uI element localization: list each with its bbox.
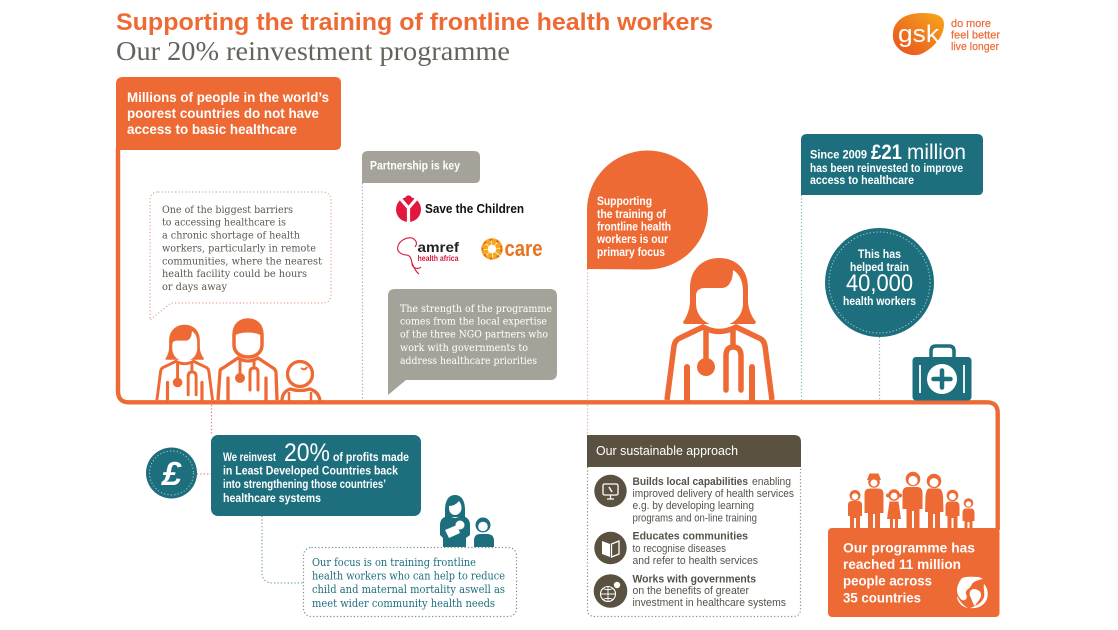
child 3 (962, 498, 974, 528)
panel: 11 million people: Our programme has (843, 540, 975, 556)
girl (886, 489, 902, 528)
callout: barriers: communities, where the nearest (162, 256, 323, 268)
callout: barriers: health facility could be hours (162, 268, 307, 280)
text: works with governments: Works with governments (632, 574, 756, 586)
logo: amref health africa: health africa (418, 254, 459, 263)
panel: 11 million people: people across (843, 572, 932, 588)
callout: strength of the programme: The strength of the programme (400, 303, 552, 315)
text: builds local capabilities: improved delivery of health services (632, 488, 794, 500)
logo: amref health africa (398, 238, 459, 274)
icon: pound coin (146, 448, 197, 498)
panel: reinvest 20%: We reinvest (223, 450, 276, 464)
badge: 40,000 health workers: This has (858, 247, 901, 261)
panel: millions of people: access to basic healthcare (127, 122, 297, 137)
callout: barriers: to accessing healthcare is (162, 216, 286, 228)
callout: barriers: or days away (162, 281, 227, 293)
timeline line (118, 148, 998, 530)
text: works with governments (632, 574, 786, 609)
icon: gsk logo: do more (951, 18, 991, 30)
badge: 40,000 health workers (825, 228, 934, 337)
callout: primary focus (587, 151, 708, 270)
icon: gsk logo: gsk (898, 21, 940, 48)
callout: primary focus: frontline health (597, 222, 671, 234)
title (116, 9, 713, 66)
icon: gsk logo (893, 13, 1000, 55)
panel: partnership is key: Partnership is key (370, 160, 461, 172)
text: builds local capabilities: enabling (752, 476, 791, 488)
panel: 21 million: access to healthcare (810, 173, 914, 187)
badge: 40,000 health workers: helped train (850, 260, 909, 274)
icon: male doctor (218, 319, 277, 400)
icon: book (594, 532, 627, 564)
callout: our focus: Our focus is on training frontline (312, 555, 476, 569)
icon: group of people (848, 472, 974, 528)
text: works with governments: investment in healthcare systems (632, 597, 786, 609)
header: our sustainable approach: Our sustainable approach (596, 443, 738, 458)
icon: mother and baby (440, 495, 494, 547)
panel: 21 million: has been reinvested to improve (810, 161, 963, 175)
header: our sustainable approach (587, 435, 801, 467)
callout: our focus: health workers who can help to reduce (312, 568, 505, 582)
child 1 (848, 490, 862, 528)
callout: our focus (304, 548, 516, 616)
text: works with governments: on the benefits of greater (632, 585, 749, 597)
icon: globe (594, 574, 627, 608)
child 2 (946, 490, 960, 528)
text: builds local capabilities: programs and on-line training (632, 512, 757, 524)
title: Supporting the training of frontline health workers (116, 9, 713, 36)
callout: barriers (150, 192, 331, 320)
panel: reinvest 20%: in Least Developed Countries back (223, 464, 398, 478)
panel: 21 million: million (907, 141, 966, 164)
callout: strength of the programme: address healthcare priorities (400, 355, 537, 367)
callout: strength of the programme: comes from the local expertise (400, 316, 547, 328)
panel: reinvest 20%: of profits made (333, 450, 409, 464)
woman (925, 474, 944, 528)
panel: reinvest 20% (211, 435, 421, 516)
panel: reinvest 20%: 20% (284, 439, 330, 467)
icon: gsk logo: feel better (951, 30, 1000, 42)
text: builds local capabilities (632, 476, 794, 524)
panel: reinvest 20%: healthcare systems (223, 491, 321, 505)
callout: strength of the programme (388, 289, 557, 395)
text: educates communities: to recognise diseases (632, 543, 726, 555)
text: educates communities: and refer to health services (632, 555, 758, 567)
logo: amref health africa: amref (418, 239, 459, 255)
panel: millions of people: Millions of people in the world’s (127, 90, 329, 105)
panel: 11 million people: reached 11 million (843, 556, 961, 572)
callout: strength of the programme: of the three NGO partners who (400, 328, 548, 340)
panel: 11 million people (828, 528, 1000, 617)
callout: barriers: workers, particularly in remote (162, 242, 316, 254)
icon: child (282, 362, 320, 401)
panel: 11 million people: 35 countries (843, 590, 921, 606)
icon: large female doctor (667, 258, 772, 400)
panel: our sustainable approach (587, 435, 801, 616)
icon: small female doctor (157, 325, 213, 400)
callout: primary focus: workers is our (596, 234, 668, 246)
callout: barriers: a chronic shortage of health (162, 230, 300, 242)
panel: reinvest 20%: into strengthening those countries’ (223, 477, 386, 491)
icon: pound coin: £ (161, 455, 182, 492)
title: Our 20% reinvestment programme (116, 36, 510, 66)
text: builds local capabilities: Builds local capabilities (632, 476, 748, 488)
panel: millions of people: poorest countries do not have (127, 106, 319, 121)
logo: care (482, 236, 542, 261)
callout: primary focus: primary focus (597, 247, 665, 259)
logo: save the children (396, 195, 524, 222)
panel: partnership is key (362, 151, 480, 183)
callout: primary focus: the training of (597, 209, 666, 221)
callout: our focus: meet wider community health needs (312, 596, 495, 610)
text: educates communities: Educates communities (632, 530, 748, 542)
logo: care: care (504, 236, 542, 261)
man with hat (864, 474, 884, 528)
badge: 40,000 health workers: 40,000 (846, 270, 913, 297)
icon: globe (957, 577, 988, 608)
man (902, 472, 922, 528)
icon: gsk logo: live longer (951, 41, 999, 53)
panel: 21 million: Since 2009 (810, 148, 867, 162)
panel: 21 million (801, 134, 983, 195)
icon: monitor (594, 475, 627, 507)
logo: save the children: Save the Children (425, 202, 524, 216)
panel: millions of people (116, 77, 341, 150)
callout: strength of the programme: work with governments to (400, 342, 528, 354)
text: educates communities (632, 530, 758, 567)
icon: first aid kit (912, 346, 972, 400)
panel: 21 million: £21 (871, 141, 902, 164)
callout: our focus: child and maternal mortality aswell as (312, 582, 505, 596)
callout: barriers: One of the biggest barriers (162, 204, 293, 216)
dotted connector lines (197, 183, 880, 583)
callout: primary focus: Supporting (597, 196, 652, 208)
text: builds local capabilities: e.g. by developing learning (632, 500, 754, 512)
badge: 40,000 health workers: health workers (843, 294, 916, 308)
